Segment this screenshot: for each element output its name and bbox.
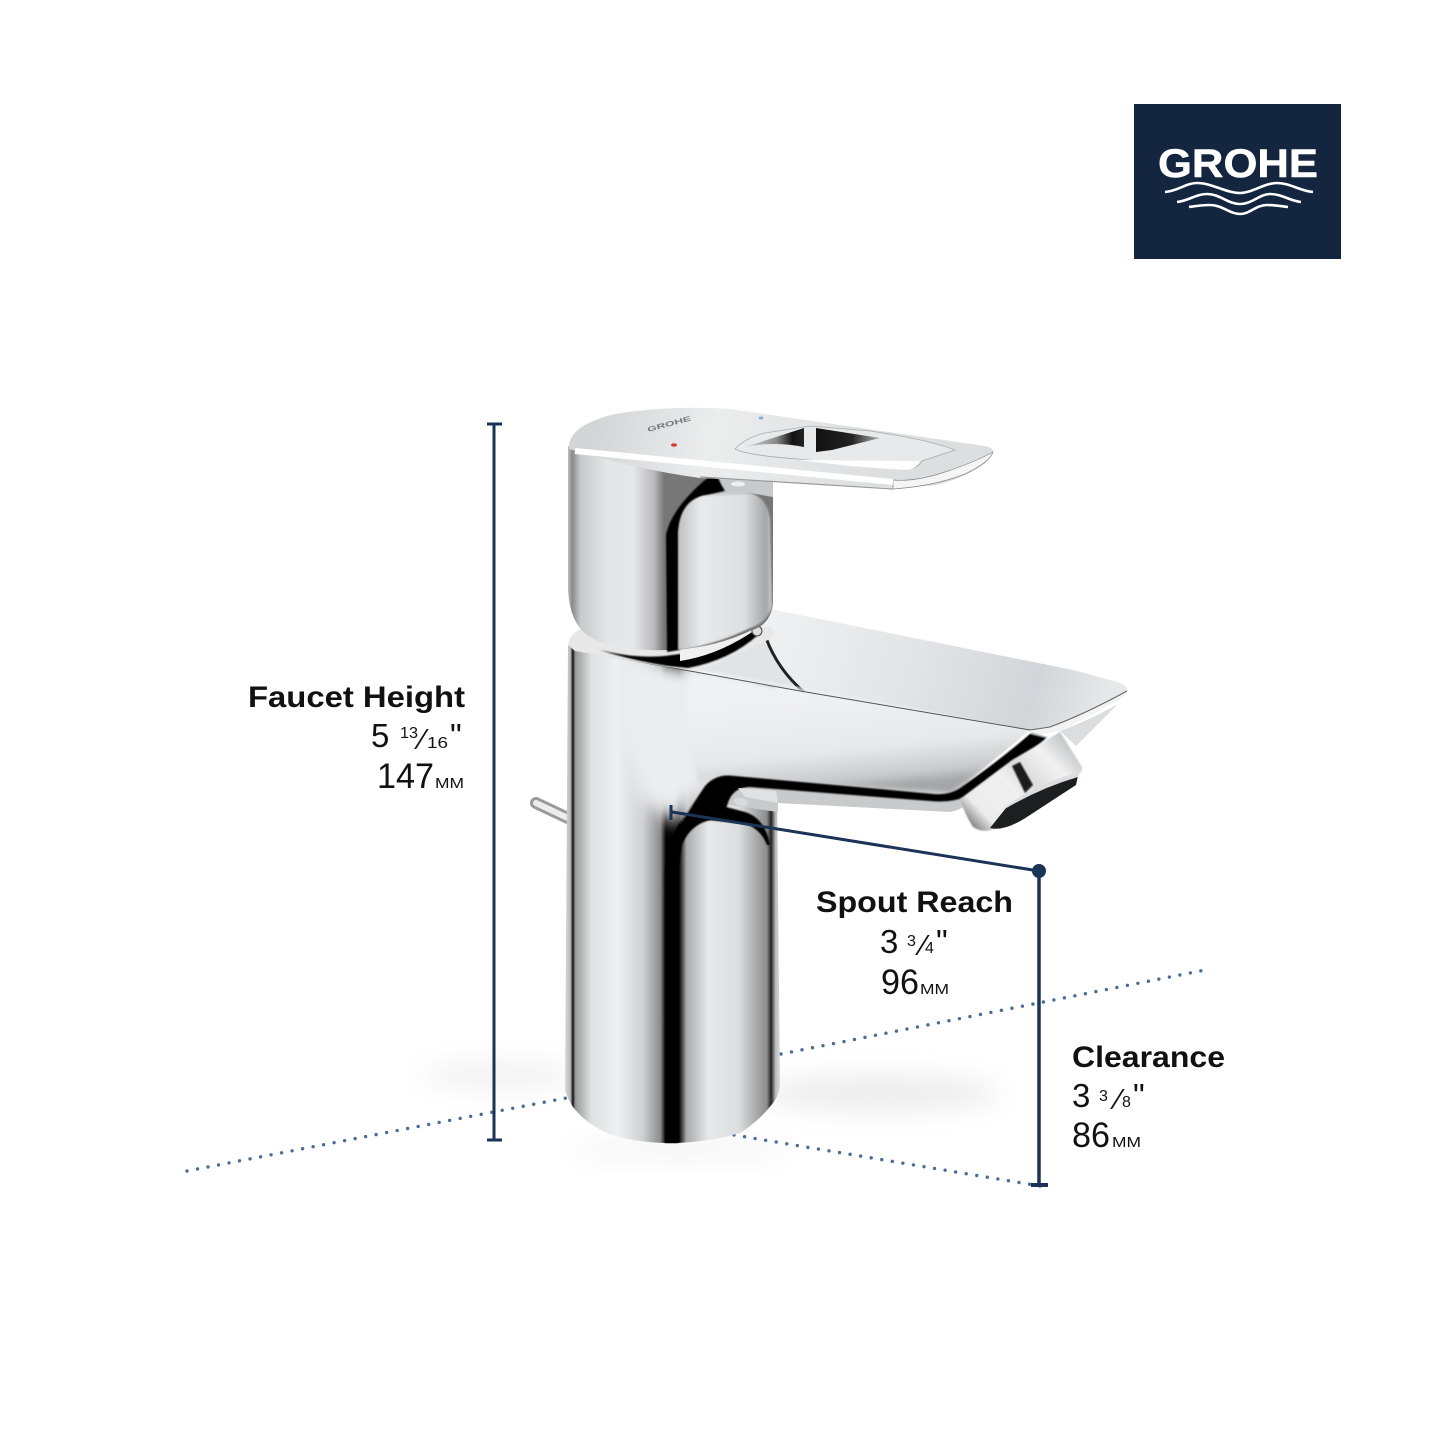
- collar ring: [568, 622, 775, 671]
- label: clearance: MM: [1112, 1134, 1141, 1151]
- label: clearance: ": [1133, 1077, 1145, 1114]
- dotted floor lines: [187, 969, 1210, 1187]
- label: faucet height: Faucet Height: [248, 681, 465, 714]
- dimension: spout reach line: [671, 805, 1046, 878]
- drain pull rod: [536, 803, 572, 820]
- label: clearance: 3: [1099, 1088, 1108, 1105]
- logo: GROHE: GROHE: [1158, 142, 1318, 186]
- label: faucet height: 13: [400, 725, 418, 742]
- aerator: [960, 732, 1082, 831]
- spout top plate: [720, 607, 1127, 746]
- cap brand mark and hot/cold dots: [647, 415, 763, 447]
- label: faucet height: ⁄: [414, 724, 429, 756]
- cap brand mark and hot/cold dots: GROHE: [647, 415, 693, 434]
- spout neck: [690, 638, 804, 692]
- dimension: faucet height line: [487, 424, 502, 1140]
- spout underside: [665, 732, 1048, 1143]
- label: faucet height: 5: [371, 717, 389, 754]
- label: spout reach: 4: [925, 940, 934, 957]
- label: spout reach: Spout Reach: [816, 886, 1013, 919]
- label: clearance: ⁄: [1110, 1084, 1125, 1116]
- label: spout reach: ⁄: [915, 930, 930, 962]
- label: spout reach: 3: [880, 923, 898, 960]
- logo: GROHE: [1134, 104, 1341, 259]
- label: faucet height: [248, 681, 465, 796]
- upper front edge line: [575, 650, 1030, 730]
- label: faucet height: 147: [377, 757, 434, 796]
- label: spout reach: ": [936, 923, 948, 960]
- label: clearance: Clearance: [1072, 1041, 1225, 1074]
- label: spout reach: 96: [881, 963, 919, 1002]
- label: spout reach: MM: [920, 981, 949, 998]
- label: clearance: [1072, 1041, 1225, 1155]
- label: spout reach: [816, 886, 1013, 1002]
- label: spout reach: 3: [907, 933, 916, 950]
- loop opening: [735, 426, 955, 470]
- faucet body column: [565, 645, 780, 1143]
- label: clearance: 3: [1072, 1077, 1090, 1114]
- label: faucet height: 16: [427, 735, 448, 752]
- label: faucet height: ": [450, 717, 462, 754]
- faucet: [536, 408, 1127, 1143]
- dimension: clearance line: [1031, 871, 1048, 1185]
- handle body: [568, 446, 773, 652]
- floor shadow: [420, 1061, 1000, 1158]
- handle cap with loop lever: [569, 408, 993, 489]
- label: clearance: 86: [1072, 1116, 1110, 1155]
- label: clearance: 8: [1122, 1094, 1131, 1111]
- label: faucet height: MM: [435, 775, 464, 792]
- spout wedge: [618, 655, 1040, 825]
